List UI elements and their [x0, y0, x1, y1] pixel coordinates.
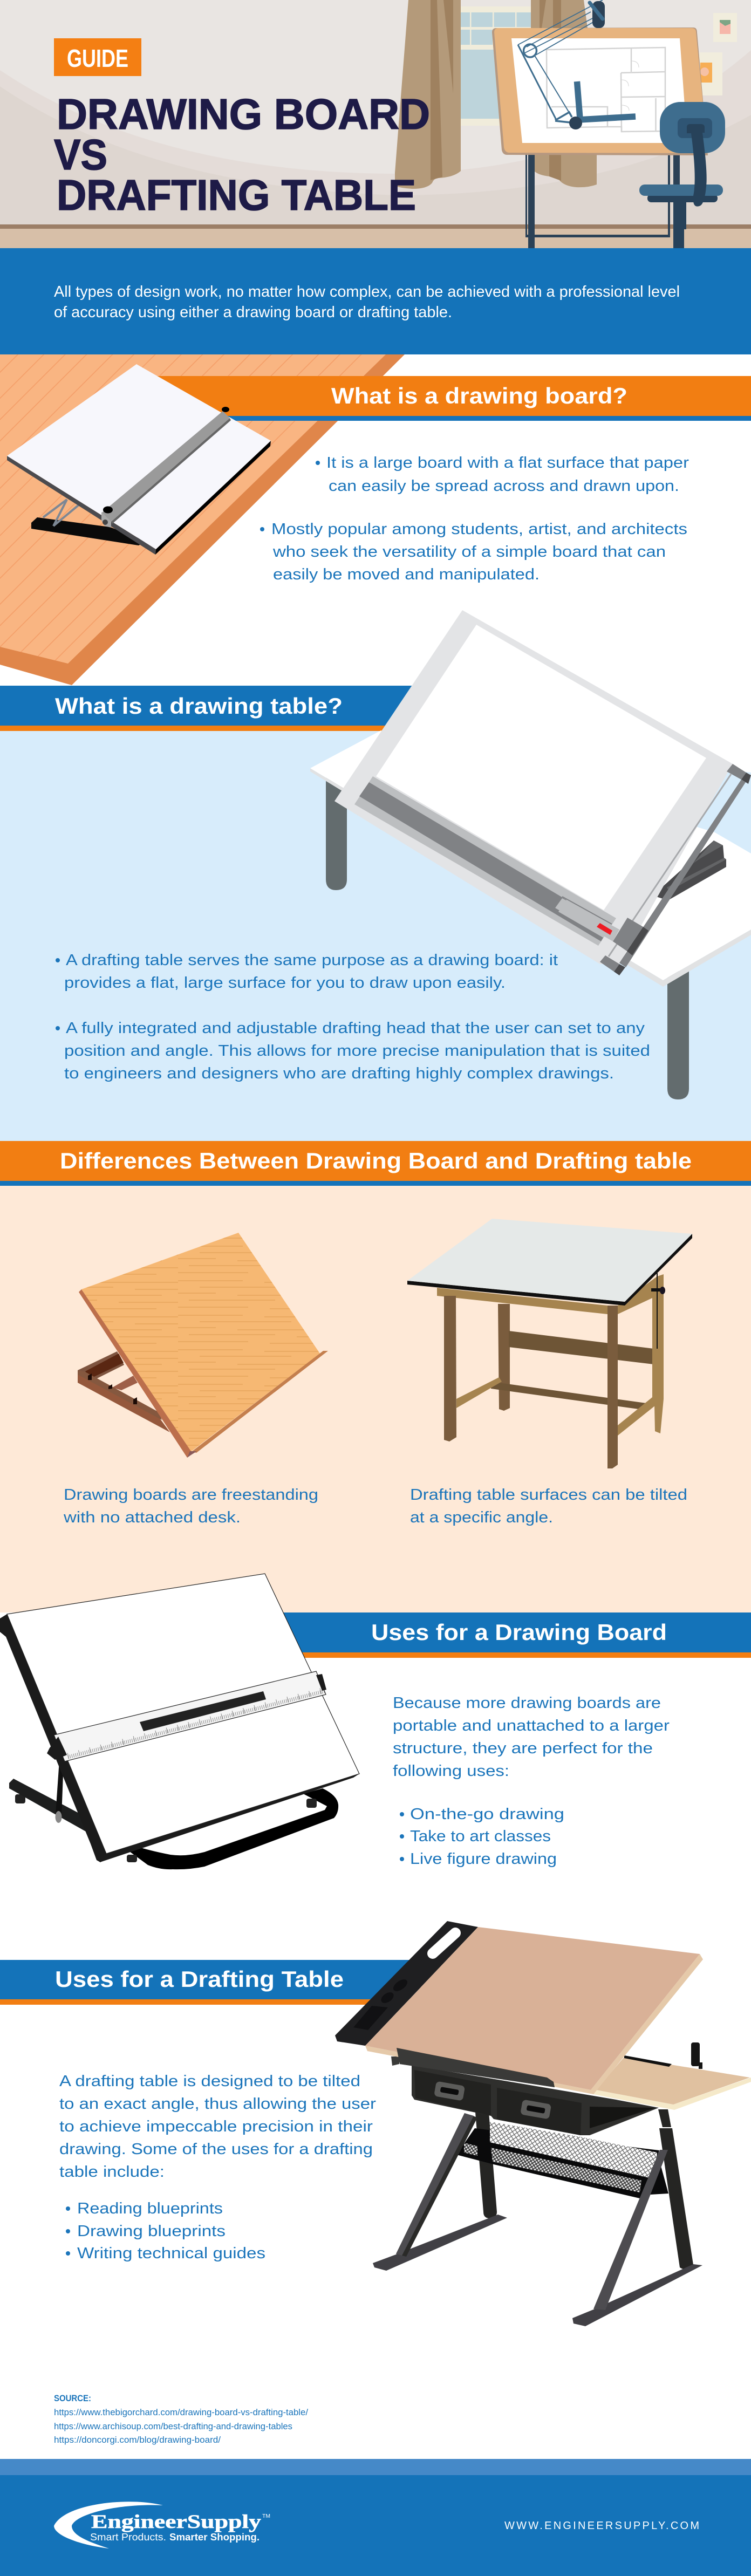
title: DRAFTING TABLE — [57, 171, 416, 219]
side shelf — [593, 2078, 751, 2110]
website: WWW.ENGINEERSUPPLY.COM — [504, 2520, 699, 2532]
curtains — [395, 0, 597, 189]
text: uses for a drawing board: On-the-go drawing — [410, 1806, 564, 1823]
text: difference captions: Drafting table surfaces can be tilted — [410, 1486, 687, 1504]
illustration: portable drawing board — [7, 364, 271, 555]
parallel rule — [354, 776, 616, 946]
intro panel: All types of design work, no matter how complex, can be achieved with a professional level — [54, 283, 680, 300]
table legs — [525, 153, 680, 248]
board surface — [7, 456, 156, 555]
sources: SOURCE: — [54, 2393, 91, 2403]
text: drawing table bullets: to engineers and designers who are drafting highly complex drawings. — [64, 1065, 614, 1082]
text: drawing board bullets: can easily be spread across and drawn upon. — [329, 477, 679, 495]
right leg, foot and brace — [658, 2109, 671, 2127]
rear arm and strut — [9, 1779, 97, 1834]
drawer handles — [434, 2081, 465, 2101]
heading bar: what is a drawing table: What is a drawing table? — [55, 693, 343, 719]
table legs — [326, 777, 347, 890]
wall art — [699, 13, 737, 95]
logo: Smart Products. — [90, 2532, 166, 2543]
board surface — [334, 610, 733, 964]
text: uses for a drafting table: to an exact angle, thus allowing the user — [59, 2095, 376, 2113]
hole and wells — [433, 1933, 455, 1953]
text: uses for a drafting table: Writing technical guides — [77, 2245, 265, 2262]
panel: what is a drawing table background — [0, 730, 751, 1141]
guide tag: GUIDE — [67, 44, 128, 72]
illustration: wooden desk surface — [0, 354, 405, 685]
drafting ruler head — [577, 81, 636, 120]
text: drawing table bullets: A drafting table serves the same purpose as a drawing board: it — [66, 952, 558, 969]
text: uses for a drafting table: to achieve impeccable precision in their — [59, 2118, 373, 2135]
heading bar: what is a drawing table — [0, 686, 426, 731]
text: drawing table bullets — [56, 952, 650, 1082]
illustration: drafting table top view — [310, 610, 751, 1099]
illustration: board on stand with ruler — [0, 1574, 359, 1869]
sources — [54, 2393, 308, 2445]
text: difference captions: Drawing boards are freestanding — [64, 1486, 318, 1504]
text: drawing board bullets: It is a large board with a flat surface that paper — [326, 454, 689, 472]
lamp arm — [518, 0, 603, 122]
logo: TM — [262, 2513, 270, 2519]
stand — [78, 1351, 124, 1384]
text: drawing table bullets: provides a flat, large surface for you to draw upon easily. — [64, 974, 506, 992]
text: uses for a drafting table: Reading blueprints — [77, 2200, 223, 2217]
illustration: wooden drafting table — [407, 1219, 692, 1468]
text: drawing board bullets — [260, 454, 689, 583]
back legs — [498, 1304, 510, 1411]
heading bar: differences: Differences Between Drawing Board and Drafting table — [60, 1148, 692, 1173]
intro panel: of accuracy using either a drawing board or drafting table. — [54, 304, 452, 321]
under drawer body — [412, 2065, 659, 2135]
frame edges — [0, 1614, 119, 1862]
heading bar: what is a drawing board: What is a drawing board? — [331, 383, 627, 408]
text: uses for a drawing board: structure, they are perfect for the — [393, 1740, 653, 1757]
chair — [639, 102, 725, 248]
text: uses for a drawing board: portable and unattached to a larger — [393, 1717, 670, 1734]
heading bar: uses for a drafting table — [0, 1960, 421, 2005]
stand — [31, 517, 147, 545]
footer — [0, 2459, 751, 2576]
title: DRAWING BOARD — [57, 90, 430, 138]
text: uses for a drawing board: following uses: — [393, 1762, 509, 1780]
text: uses for a drafting table: A drafting table is designed to be tilted — [59, 2073, 360, 2090]
sources: https://doncorgi.com/blog/drawing-board/ — [54, 2435, 221, 2445]
text: uses for a drawing board: Take to art classes — [410, 1828, 551, 1845]
table support — [653, 841, 726, 900]
text: difference captions: with no attached desk. — [63, 1509, 241, 1526]
feet — [15, 1794, 317, 1862]
heading bar: uses for a drawing board — [281, 1612, 751, 1658]
board rail — [335, 1921, 478, 2046]
tilt knob — [657, 1273, 658, 1349]
title — [54, 90, 430, 219]
hero banner — [0, 0, 751, 248]
floor plan — [547, 47, 665, 132]
logo: Smarter Shopping. — [169, 2532, 260, 2543]
text: drawing board bullets: who seek the versatility of a simple board that can — [272, 543, 666, 561]
board lips — [79, 1289, 191, 1458]
straight edge — [101, 411, 230, 522]
text: uses for a drawing board — [393, 1694, 670, 1868]
left foot and brace — [373, 2215, 507, 2271]
mesh shelf — [456, 2128, 659, 2198]
text: drawing board bullets: Mostly popular among students, artist, and architects — [271, 521, 687, 538]
text: drawing table bullets: A fully integrated and adjustable drafting head that the user can set to any — [66, 1020, 645, 1037]
board surface — [81, 1233, 320, 1453]
heading bar: what is a drawing board — [156, 376, 751, 421]
illustration: black drafting table with drawers — [335, 1921, 751, 2326]
drawers — [414, 2070, 491, 2116]
text: uses for a drafting table: drawing. Some of the uses for a drafting — [59, 2141, 373, 2158]
heading bar: uses for a drawing board: Uses for a Drawing Board — [371, 1620, 667, 1645]
logo: EngineerSupply — [91, 2511, 261, 2532]
parallel ruler — [54, 1671, 326, 1761]
window — [461, 6, 531, 126]
sources: https://www.thebigorchard.com/drawing-board-vs-drafting-table/ — [54, 2407, 308, 2417]
text: difference captions — [63, 1486, 687, 1526]
logo — [54, 2502, 270, 2548]
hero wall and floor — [0, 0, 751, 248]
text: difference captions: at a specific angle. — [410, 1509, 553, 1526]
table top — [365, 1954, 703, 2094]
table surface — [310, 768, 751, 987]
hero drafting table — [492, 0, 708, 248]
side knob — [691, 2042, 700, 2066]
title: VS — [54, 131, 107, 179]
heading bar: uses for a drafting table: Uses for a Drafting Table — [55, 1966, 344, 1992]
carry handle — [129, 1788, 338, 1869]
text: uses for a drafting table — [59, 2073, 376, 2262]
hero board — [492, 28, 708, 155]
guide tag — [54, 38, 141, 76]
panel: differences background — [0, 1186, 751, 1612]
text: drawing board bullets: easily be moved and manipulated. — [273, 566, 540, 583]
front legs — [444, 1296, 456, 1441]
text: uses for a drawing board: Because more drawing boards are — [393, 1694, 661, 1712]
heading bar: differences — [0, 1141, 751, 1186]
sources: https://www.archisoup.com/best-drafting-and-drawing-tables — [54, 2421, 292, 2431]
board surface — [7, 1574, 359, 1854]
table top — [407, 1234, 692, 1306]
apron — [437, 1288, 607, 1314]
under board panel — [397, 2048, 555, 2087]
text: drawing table bullets: position and angle. This allows for more precise manipulation that is suited — [64, 1042, 650, 1060]
right rail — [619, 780, 746, 967]
back left leg — [475, 2112, 497, 2218]
illustration: wooden drawing board — [78, 1233, 328, 1458]
text: uses for a drafting table: Drawing blueprints — [77, 2223, 226, 2240]
text: uses for a drawing board: Live figure drawing — [410, 1850, 557, 1868]
clamps — [727, 764, 746, 780]
intro panel — [0, 248, 751, 354]
text: uses for a drafting table: table include: — [59, 2163, 165, 2181]
cross bars — [509, 1331, 654, 1364]
